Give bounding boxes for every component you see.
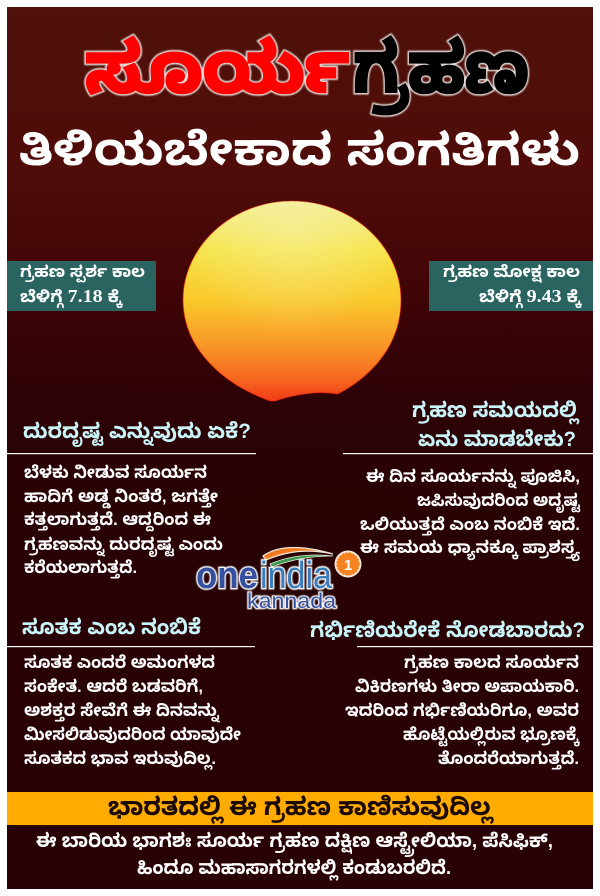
text: sutaka belief: ಸೂತಕ ಎಂದರೆ ಅಮಂಗಳದ (24, 653, 215, 672)
text: why pregnant women should not watch: ತೊಂದರೆಯಾಗುತ್ತದೆ. (438, 749, 579, 770)
heading: what to do during eclipse (343, 399, 593, 454)
text: why inauspicious (24, 463, 223, 579)
heading: why pregnant women should not watch: ಗರ್ಭಿಣಿಯರೇಕೆ ನೋಡಬಾರದು? (310, 619, 585, 642)
heading: what to do during eclipse: ಏನು ಮಾಡಬೇಕು? (418, 428, 576, 451)
text: sutaka belief: ಸಂಕೇತ. ಆದರೆ ಬಡವರಿಗೆ, (24, 677, 203, 696)
logo kannada label: kannada (247, 590, 336, 613)
text: why inauspicious: ಬೆಳಕು ನೀಡುವ ಸೂರ್ಯನ (24, 463, 207, 482)
title: ಗ್ರಹಣ (353, 29, 529, 115)
sun image (183, 201, 401, 401)
text: where eclipse is visible (36, 831, 553, 881)
text: what to do during eclipse (360, 467, 581, 562)
text: why pregnant women should not watch (345, 653, 580, 770)
text: sutaka belief: ಸೂತಕದ ಭಾವ ಇರುವುದಿಲ್ಲ. (24, 749, 216, 771)
text: why inauspicious: ಕತ್ತಲಾಗುತ್ತದೆ. ಆದ್ದರಿಂದ ಈ (24, 510, 211, 532)
text: why inauspicious: ಗ್ರಹಣವನ್ನು ದುರದೃಷ್ಟ ಎಂದು (24, 535, 223, 557)
text: why pregnant women should not watch: ಇದರಿಂದ ಗರ್ಭಿಣಿಯರಿಗೂ, ಅವರ (345, 701, 579, 720)
banner: not visible in India: ಭಾರತದಲ್ಲಿ ಈ ಗ್ರಹಣ ಕಾಣಿಸುವುದಿಲ್ಲ (108, 793, 495, 825)
callout: eclipse end time: ಗ್ರಹಣ ಮೋಕ್ಷ ಕಾಲ (443, 264, 580, 283)
logo badge (334, 550, 362, 578)
text: why inauspicious: ಹಾದಿಗೆ ಅಡ್ಡ ನಿಂತರೆ, ಜಗತ್ತೇ (24, 487, 218, 509)
text: what to do during eclipse: ಒಲಿಯುತ್ತದೆ ಎಂಬ ನಂಬಿಕೆ ಇದೆ. (360, 515, 580, 536)
text: why pregnant women should not watch: ವಿಕಿರಣಗಳು ತೀರಾ ಅಪಾಯಕಾರಿ. (355, 677, 579, 696)
callout: eclipse start time (7, 261, 156, 311)
logo halo: one (196, 555, 258, 597)
callout: eclipse end time: ಬೆಳಿಗ್ಗೆ 9.43 ಕ್ಕೆ (479, 286, 582, 309)
logo swoosh (263, 547, 333, 567)
title (85, 29, 529, 115)
logo: oneindia kannada (196, 547, 362, 613)
title: ಗ್ರಹಣ (353, 29, 529, 115)
text: what to do during eclipse: ಜಪಿಸುವುದರಿಂದ ಅದೃಷ್ಟ (417, 491, 581, 513)
logo halo: india (260, 555, 333, 597)
text: why pregnant women should not watch: ಗ್ರಹಣ ಕಾಲದ ಸೂರ್ಯನ (404, 653, 579, 674)
text: why pregnant women should not watch: ಹೊಟ್ಟೆಯಲ್ಲಿರುವ ಭ್ರೂಣಕ್ಕೆ (403, 725, 580, 747)
title: ಸೂರ್ಯ (85, 29, 349, 107)
text: sutaka belief: ಮೀಸಲಿಡುವುದರಿಂದ ಯಾವುದೇ (24, 725, 241, 744)
title: ಸೂರ್ಯ (85, 29, 349, 107)
logo wordmark: india: india (260, 555, 333, 597)
heading: what to do during eclipse: ಗ್ರಹಣ ಸಮಯದಲ್ಲಿ (412, 399, 580, 425)
logo badge: 1 (344, 557, 352, 574)
heading: why inauspicious: ದುರದೃಷ್ಟ ಎನ್ನುವುದು ಏಕೆ? (23, 420, 251, 447)
logo wordmark: one: one (196, 555, 258, 597)
text: where eclipse is visible: ಹಿಂದೂ ಮಹಾಸಾಗರಗಳಲ್ಲಿ ಕಂಡುಬರಲಿದೆ. (137, 858, 451, 881)
logo halo (196, 555, 336, 613)
banner: not visible in India (7, 792, 593, 825)
text: where eclipse is visible: ಈ ಬಾರಿಯ ಭಾಗಶಃ ಸೂರ್ಯ ಗ್ರಹಣ ದಕ್ಷಿಣ ಆಸ್ಟ್ರೇಲಿಯಾ, ಪೆಸಿಫಿಕ್, (36, 831, 553, 857)
text: what to do during eclipse: ಈ ಸಮಯ ಧ್ಯಾನಕ್ಕೂ ಪ್ರಾಶಸ್ತ್ಯ (360, 538, 580, 562)
callout: eclipse start time: ಬೆಳಿಗ್ಗೆ 7.18 ಕ್ಕೆ (20, 286, 123, 309)
callout: eclipse end time (429, 261, 593, 311)
text: sutaka belief: ಅಶಕ್ತರ ಸೇವೆಗೆ ಈ ದಿನವನ್ನು (24, 701, 220, 723)
callout: eclipse start time: ಗ್ರಹಣ ಸ್ಪರ್ಶ ಕಾಲ (20, 264, 145, 283)
text: why inauspicious: ಕರೆಯಲಾಗುತ್ತದೆ. (24, 558, 137, 579)
heading: sutaka belief: ಸೂತಕ ಎಂಬ ನಂಬಿಕೆ (22, 616, 201, 639)
logo halo: kannada (247, 590, 336, 613)
subtitle: ತಿಳಿಯಬೇಕಾದ ಸಂಗತಿಗಳು (19, 124, 580, 175)
text: what to do during eclipse: ಈ ದಿನ ಸೂರ್ಯನನ್ನು ಪೂಜಿಸಿ, (366, 467, 580, 489)
text: sutaka belief (24, 653, 241, 771)
